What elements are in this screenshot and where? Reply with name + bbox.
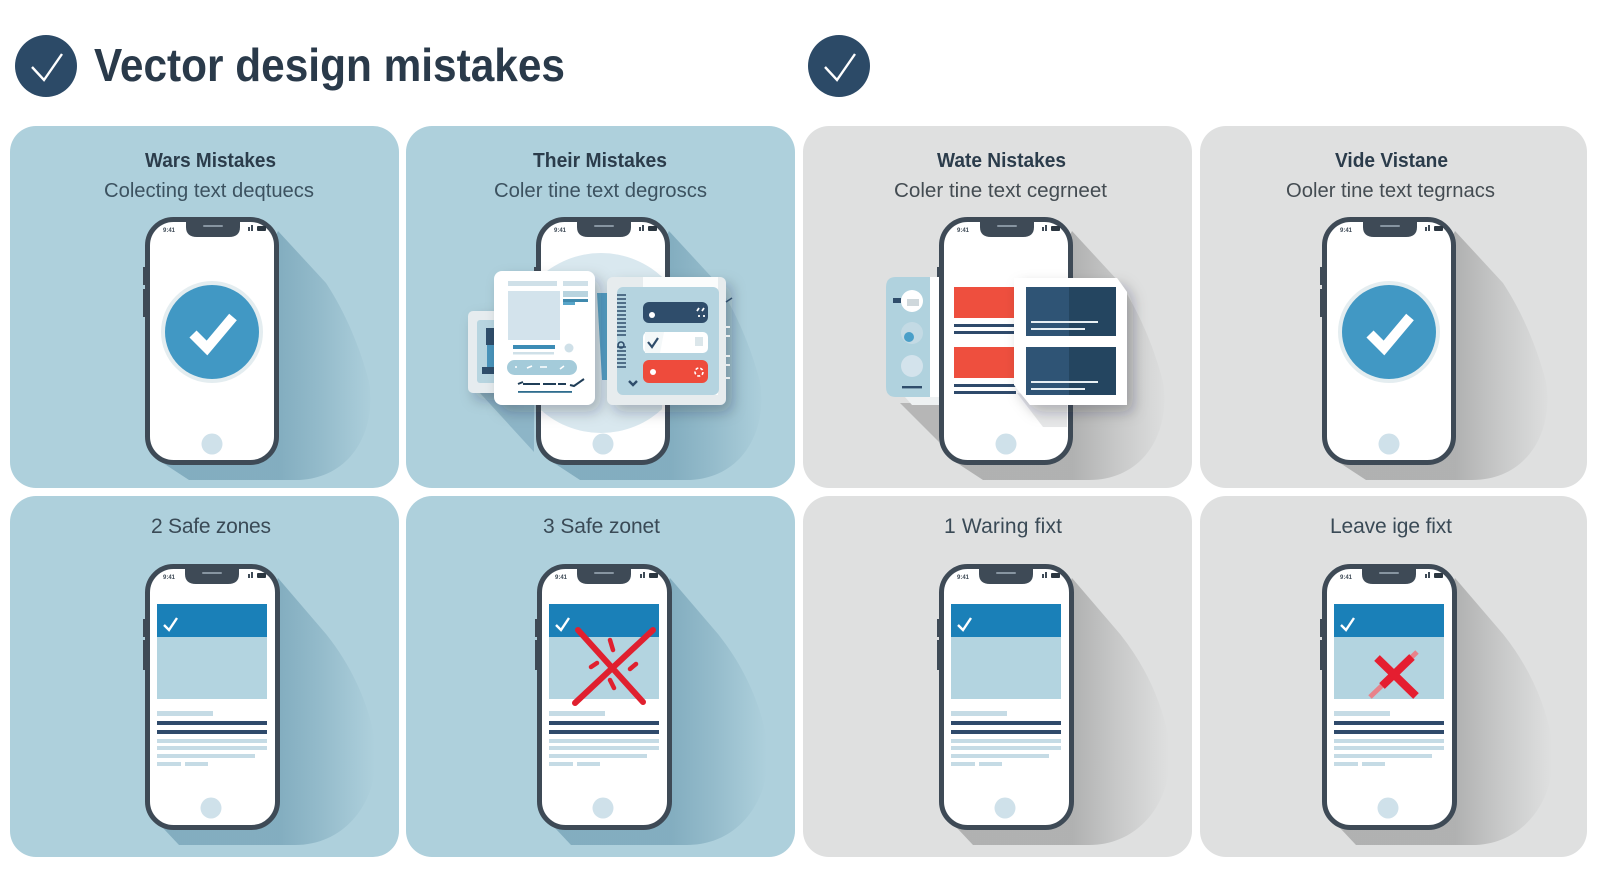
- phone layout: [1320, 566, 1553, 845]
- caption: 3 Safe zonet: [543, 515, 660, 538]
- phone with overlapping cards: [468, 219, 761, 480]
- icon: large red cross: [575, 630, 653, 703]
- phone layout: [143, 566, 376, 845]
- panel: 3 Safe zonet: [406, 496, 795, 857]
- cast shadow left of phone: [900, 403, 939, 442]
- panel: Wate Nistakes: [803, 126, 1192, 488]
- phone layout: [937, 566, 1170, 845]
- heading: Their Mistakes: [533, 150, 667, 172]
- subheading: Coler tine text cegrneet: [894, 180, 1107, 202]
- panel: Their Mistakes: [406, 126, 795, 488]
- subheading: Ooler tine text tegrnacs: [1286, 180, 1495, 202]
- icon: second check badge: [808, 35, 870, 97]
- panel: 2 Safe zones: [10, 496, 399, 857]
- panel: Vide Vistane: [1200, 126, 1587, 488]
- phone layout: [535, 566, 768, 845]
- subheading: Colecting text deqtuecs: [104, 180, 314, 202]
- white card with navy blocks: [1014, 278, 1127, 405]
- back left card: [468, 311, 508, 393]
- subheading: Coler tine text degroscs: [494, 180, 707, 202]
- light disc behind cards: [541, 253, 662, 433]
- heading: Wars Mistakes: [145, 150, 276, 172]
- caption: 2 Safe zones: [151, 515, 271, 538]
- heading: Wate Nistakes: [937, 150, 1066, 172]
- phone with check: [143, 219, 370, 480]
- left side strip: [886, 277, 939, 405]
- main white card: [494, 271, 595, 405]
- cast shadow left of phone: [480, 393, 534, 452]
- phone with red and navy cards: [886, 219, 1164, 480]
- title: Vector design mistakes: [94, 39, 565, 91]
- panel: Wars Mistakes: [10, 126, 399, 488]
- card cast shadow: [1017, 393, 1067, 427]
- panel: Leave ige fixt: [1200, 496, 1587, 857]
- phone with check: [1320, 219, 1547, 480]
- icon: small red cross: [1370, 652, 1417, 697]
- caption: 1 Waring fixt: [944, 515, 1062, 538]
- panel: 1 Waring fixt: [803, 496, 1192, 857]
- caption: Leave ige fixt: [1330, 515, 1452, 538]
- icon: title check badge: [15, 35, 77, 97]
- red blocks and rules: [954, 287, 1016, 394]
- heading: Vide Vistane: [1335, 150, 1448, 172]
- right control card: [607, 277, 732, 405]
- header: [15, 35, 565, 97]
